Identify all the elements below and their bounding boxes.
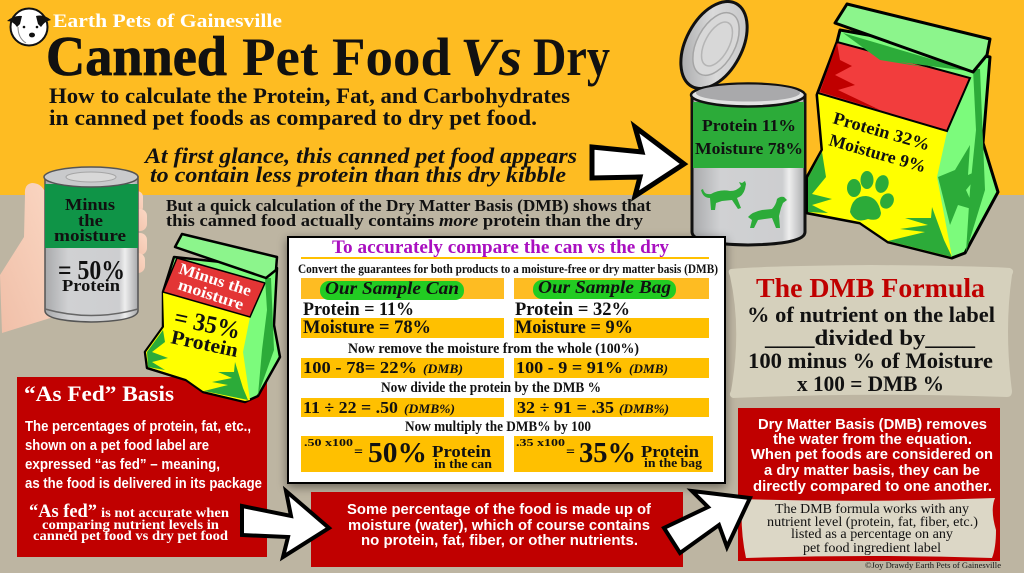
icon: dog silhouette: [748, 197, 787, 228]
as fed paragraph: [25, 418, 262, 492]
first glance statement: to contain less protein than this dry kibble: [150, 162, 566, 187]
small can text: Protein: [62, 276, 121, 295]
small can text: = 50%: [58, 255, 125, 285]
small can text: [54, 195, 127, 295]
panel: moisture note: Some percentage of the food is made up of: [347, 501, 652, 518]
formula lines: [747, 302, 995, 396]
icon: dog logo: [7, 8, 51, 46]
row: moisture: Moisture = 78%: [303, 317, 431, 338]
panel: as fed basis: [17, 377, 267, 557]
row: results can: =: [354, 445, 363, 460]
row: division: [301, 398, 709, 417]
icon: small kibble bag: [145, 234, 280, 402]
step: remove moisture: Now remove the moisture from the whole (100%): [348, 341, 639, 357]
row: division: 32 ÷ 91 = .35: [517, 398, 614, 417]
row: protein: Protein = 32%: [515, 299, 630, 320]
arrow: can and bag comparison: [592, 127, 684, 196]
subtitle: in canned pet foods as compared to dry pet food.: [49, 105, 537, 130]
as fed warning: is not accurate when: [101, 506, 229, 521]
title: Vs: [460, 27, 522, 87]
row: protein: Protein = 11%: [303, 299, 414, 320]
panel: moisture note: no protein, fat, fiber, or other nutrients.: [361, 532, 638, 549]
bag green accents: [808, 33, 985, 257]
DMB statement: But a quick calculation of the Dry Matter Basis (DMB) shows that: [166, 196, 651, 215]
small bag text: = 35%: [172, 304, 243, 345]
bag text: Moisture 9%: [827, 130, 929, 176]
row: sample headers: [301, 277, 709, 300]
row: moisture: Moisture = 9%: [515, 317, 633, 338]
label text: Protein 11%: [702, 116, 796, 135]
formula lines: x 100 = DMB %: [797, 371, 944, 396]
inset note: pet food ingredient label: [803, 540, 941, 555]
title: Dry: [533, 27, 610, 87]
row: dmb: (DMB): [423, 362, 463, 376]
row: results can: in the can: [434, 456, 493, 471]
label text: [695, 116, 803, 158]
subtitle: [49, 83, 570, 130]
red panel text: When pet foods are considered on: [751, 447, 993, 463]
small bag body: [145, 257, 280, 402]
inset note: The DMB formula works with any: [775, 501, 969, 516]
small can text: moisture: [54, 226, 127, 245]
small can text: Minus: [65, 195, 115, 214]
row: results can: [301, 436, 504, 472]
small bag fold: [175, 234, 277, 278]
as fed paragraph: The percentages of protein, fat, etc.,: [25, 418, 251, 435]
row: dmb: 100 - 78= 22%: [303, 358, 417, 377]
small can lid: [44, 167, 138, 187]
background: tan lower band: [0, 195, 1024, 573]
red panel: [818, 42, 970, 131]
bag text: Protein 32%: [831, 108, 933, 154]
row: results can: Protein: [432, 442, 492, 461]
red panel text: Dry Matter Basis (DMB) removes: [758, 417, 987, 433]
row: dmb: [301, 358, 709, 378]
red panel text: [751, 417, 993, 495]
background: yellow upper band: [0, 0, 1024, 195]
title: [46, 26, 610, 88]
row: results bag: in the bag: [644, 455, 703, 470]
inset note: [742, 498, 996, 558]
can rim: [691, 84, 805, 106]
red panel text: the water from the equation.: [773, 432, 972, 448]
row: division: (DMB%): [404, 402, 455, 416]
formula lines: % of nutrient on the label: [747, 302, 995, 327]
as fed heading: “As Fed” Basis: [24, 381, 174, 406]
row: sample headers: Our Sample Bag: [538, 277, 671, 297]
icon: large kibble bag: [807, 4, 998, 258]
row: dmb: 100 - 9 = 91%: [516, 358, 623, 377]
as fed warning: [29, 501, 229, 544]
bag body: [807, 30, 998, 258]
small bag text: Protein: [169, 326, 240, 362]
arrow: moisture note to DMB: [664, 491, 750, 553]
panel: moisture note: [311, 492, 683, 567]
green label: [693, 102, 804, 168]
row: results bag: =: [566, 445, 575, 460]
row: protein: [303, 299, 630, 320]
table heading: To accurately compare the can vs the dry: [332, 237, 670, 258]
row: results can: 50%: [368, 437, 427, 469]
title: Canned: [46, 26, 227, 88]
small bag text: moisture: [176, 277, 246, 314]
small bag yellow: [146, 292, 250, 401]
panel: moisture note: moisture (water), which of course contains: [348, 517, 650, 534]
small can text: the: [78, 211, 103, 230]
title: Pet Food: [242, 27, 451, 87]
can lid: [667, 0, 761, 100]
first glance statement: At first glance, this canned pet food appears: [143, 143, 577, 168]
table intro: Convert the guarantees for both products to a moisture-free or dry matter basis (DMB): [298, 261, 718, 276]
step: divide: Now divide the protein by the DMB %: [381, 380, 601, 396]
row: dmb: (DMB): [629, 362, 668, 376]
row: moisture: [301, 317, 709, 338]
DMB statement: this canned food actually contains more protein than the dry: [166, 211, 644, 230]
small can bottom ridge: [45, 309, 138, 316]
bag text: [827, 108, 933, 176]
DMB statement: [166, 196, 651, 230]
panel: dry matter basis explanation: [738, 408, 1000, 561]
copyright: ©Joy Drawdy Earth Pets of Gainesville: [865, 561, 1001, 570]
row: results bag: .35 x100: [516, 438, 565, 449]
small can body: [45, 177, 138, 322]
as fed paragraph: expressed “as fed” – meaning,: [25, 456, 220, 473]
small bag text: [169, 261, 253, 362]
formula lines: ____divided by____: [764, 325, 976, 350]
label text: Moisture 78%: [695, 139, 803, 158]
can body: [692, 95, 805, 245]
small can label: [45, 184, 138, 248]
icon: open can: [667, 0, 805, 245]
small bag text: Minus the: [177, 261, 253, 300]
red panel text: directly compared to one another.: [753, 479, 992, 495]
hand: [0, 183, 147, 333]
row: results can: .50 x100: [304, 438, 353, 449]
icon: cat silhouette: [701, 181, 746, 210]
panel: comparison table: [288, 237, 725, 483]
row: division: (DMB%): [619, 402, 669, 416]
as fed paragraph: shown on a pet food label are: [25, 437, 209, 454]
first glance statement: [143, 143, 577, 187]
row: sample headers: Our Sample Can: [325, 278, 459, 298]
small bag green accents: [147, 278, 274, 400]
as fed warning: comparing nutrient levels in: [42, 518, 219, 533]
row: results bag: [514, 436, 713, 472]
row: division: 11 ÷ 22 = .50: [303, 398, 398, 417]
row: results bag: Protein: [641, 442, 700, 461]
step: multiply: Now multiply the DMB% by 100: [405, 419, 591, 435]
as fed warning: “As fed”: [29, 501, 97, 522]
as fed warning: canned pet food vs dry pet food: [33, 529, 228, 544]
arrow: as fed to moisture note: [242, 491, 329, 557]
as fed paragraph: as the food is delivered in its package: [25, 475, 262, 492]
yellow panel: [808, 94, 952, 257]
bag fold: [835, 4, 990, 72]
inset note: nutrient level (protein, fat, fiber, etc.): [767, 514, 978, 529]
small bag red: [163, 258, 265, 317]
icon: paw print: [847, 171, 897, 220]
brand name: Earth Pets of Gainesville: [53, 12, 282, 32]
row: results bag: 35%: [579, 437, 636, 469]
red panel text: a dry matter basis, they can be: [764, 463, 980, 479]
inset note: listed as a percentage on any: [791, 526, 953, 541]
formula lines: 100 minus % of Moisture: [748, 348, 993, 373]
subtitle: How to calculate the Protein, Fat, and Carbohydrates: [49, 83, 570, 108]
formula heading: The DMB Formula: [756, 273, 986, 303]
red panel shade: [820, 43, 880, 110]
panel: DMB formula: [729, 265, 1013, 398]
icon: hand holding can: [0, 167, 147, 333]
